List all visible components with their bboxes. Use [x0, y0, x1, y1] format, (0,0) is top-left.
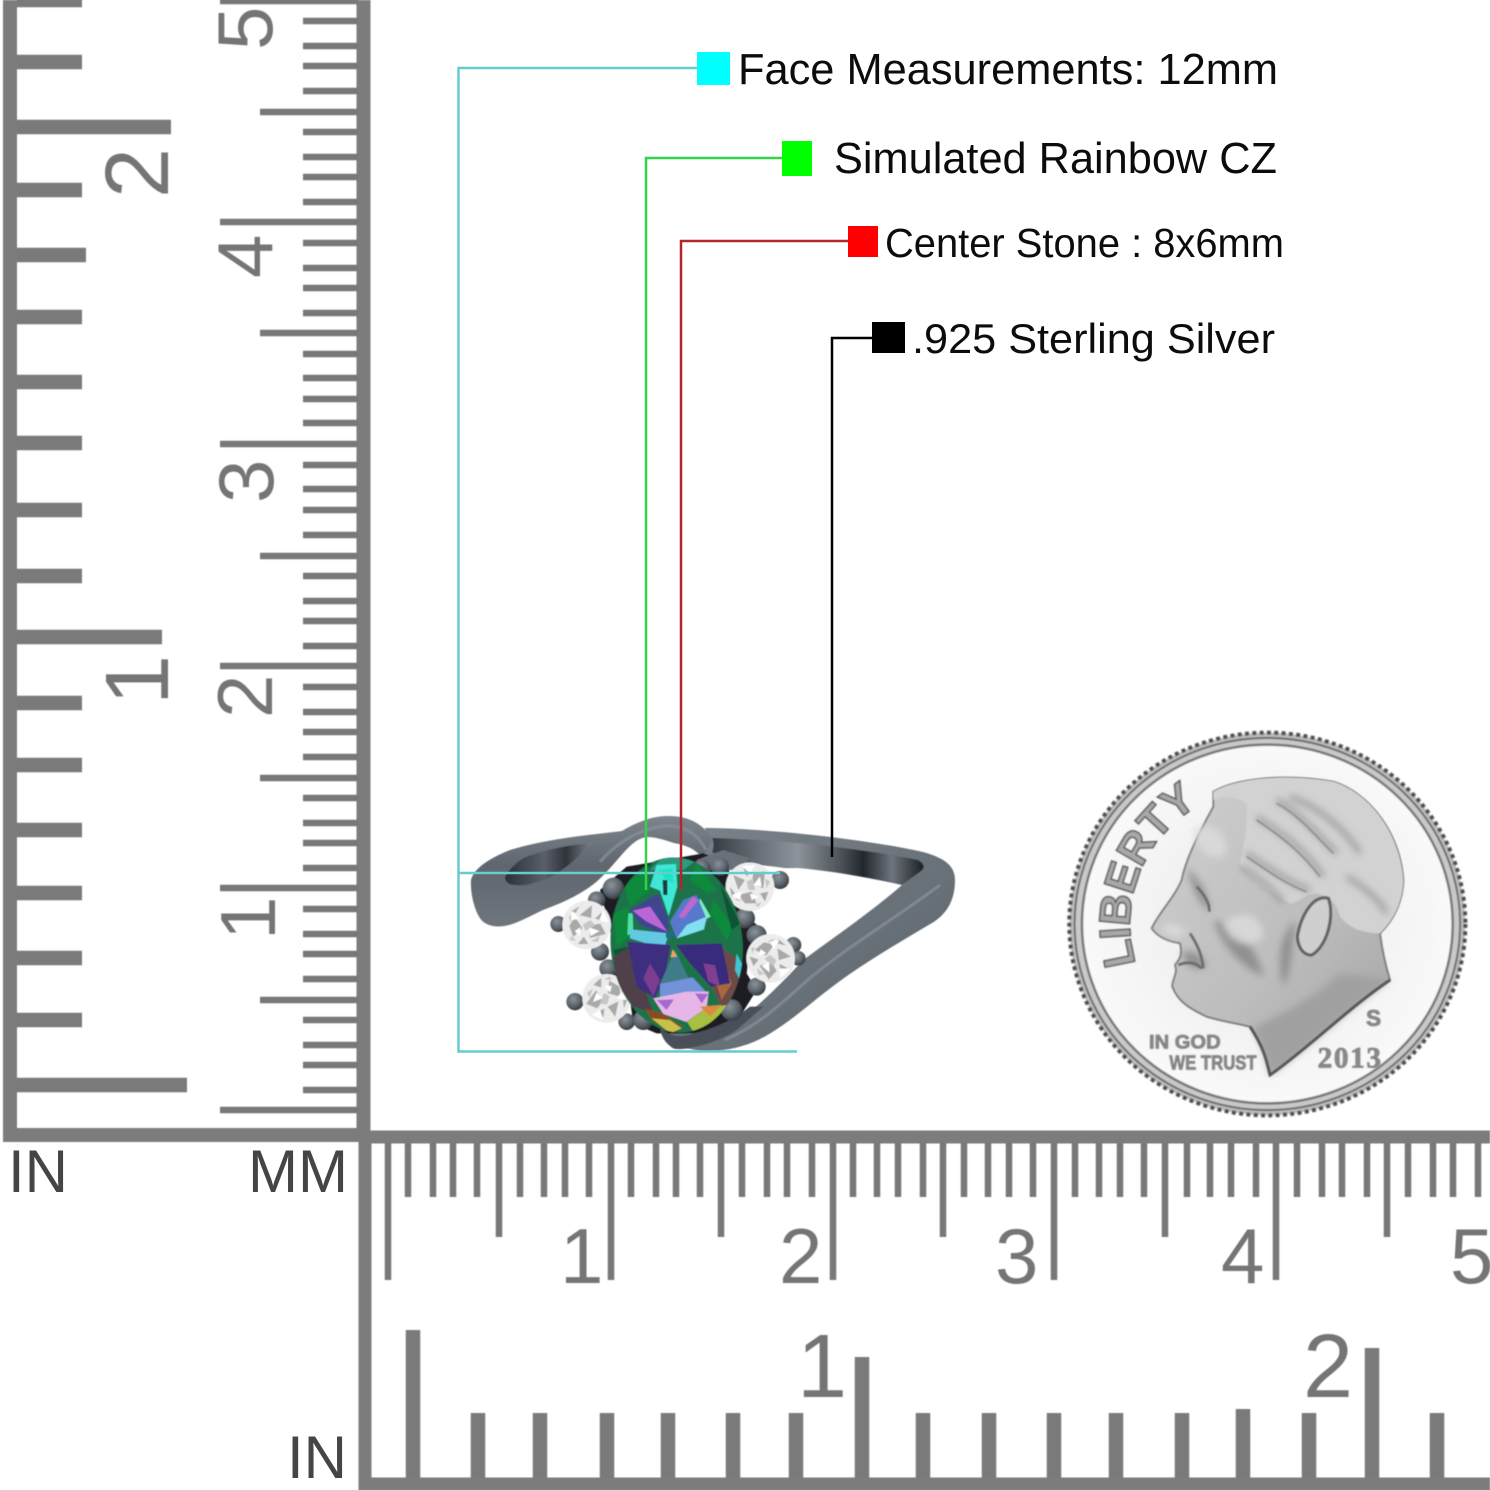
- callout: simulated rainbow CZ: [646, 134, 1277, 890]
- peak highlight: [600, 826, 706, 862]
- centimetre numerals: [201, 7, 292, 940]
- centimetre numerals: [560, 1212, 1490, 1300]
- inch numerals: 1: [797, 1317, 847, 1417]
- green leader line: [646, 158, 782, 890]
- inch scale ticks: [17, 0, 187, 1085]
- mystic oval centre stone: [607, 853, 747, 1037]
- small clear stone left: [555, 894, 618, 956]
- callout: sterling silver: [832, 315, 1275, 857]
- motto second line: WE TRUST: [1169, 1051, 1257, 1074]
- cheek highlight: [1160, 826, 1263, 944]
- label text: Simulated Rainbow CZ: [834, 134, 1277, 183]
- eye and mouth creases: [1178, 887, 1209, 968]
- centimetre numerals: 4: [201, 235, 289, 278]
- inch numerals: 2: [88, 148, 188, 198]
- hair: [1213, 778, 1403, 933]
- neck shadow: [1253, 973, 1390, 1075]
- dark setting base: [600, 853, 763, 1033]
- bust lower edge: [1250, 980, 1390, 1075]
- label text: Face Measurements: 12mm: [738, 45, 1278, 94]
- millimetre scale ticks: [388, 1143, 1478, 1280]
- portrait: [1152, 778, 1403, 1075]
- centimetre numerals: 2: [201, 675, 289, 718]
- unit label: IN left: IN: [8, 1138, 68, 1205]
- callout: face measurements: [458, 45, 1278, 1052]
- band highlight: [725, 885, 940, 1040]
- inch scale ticks: [413, 1330, 1437, 1478]
- right side of the band: [661, 828, 955, 1051]
- ruler frame: [365, 1137, 1490, 1484]
- centimetre numerals: 5: [201, 7, 289, 50]
- ring illustration: [471, 816, 955, 1051]
- dime coin: [1066, 730, 1468, 1118]
- mint mark: S: [1366, 1005, 1381, 1031]
- left vertical ruler: [10, 0, 364, 1135]
- cyan bracket lines: [458, 68, 797, 1052]
- centimetre numerals: 2: [779, 1212, 822, 1300]
- prongs: [550, 858, 806, 1030]
- red leader line: [681, 241, 848, 890]
- opening of the left band: [505, 843, 592, 885]
- callout: center stone: [681, 220, 1284, 890]
- inch numerals: 1: [88, 655, 188, 705]
- face shadows: [1182, 868, 1297, 987]
- red key square: [848, 226, 878, 257]
- inch numerals: [797, 1317, 1353, 1417]
- coin field: [1082, 745, 1453, 1103]
- inch numerals: [88, 148, 188, 705]
- inch numerals: 2: [1303, 1317, 1353, 1417]
- label text: Center Stone : 8x6mm: [885, 220, 1284, 266]
- label text: .925 Sterling Silver: [912, 315, 1275, 362]
- stone setting: [550, 850, 806, 1049]
- centimetre numerals: 3: [995, 1212, 1038, 1300]
- small clear stone right: [736, 924, 805, 993]
- unit label: MM: MM: [248, 1138, 348, 1205]
- centimetre numerals: 4: [1221, 1212, 1264, 1300]
- small clear stone top right: [726, 862, 774, 911]
- coin lettering: LIBERTY: [1098, 778, 1190, 969]
- unit label: IN bottom: IN: [287, 1424, 347, 1490]
- centimetre numerals: 1: [204, 897, 292, 940]
- motto: IN GOD: [1149, 1032, 1221, 1053]
- millimetre scale ticks: [220, 1, 358, 1110]
- cyan key square: [697, 52, 730, 85]
- black key square: [872, 322, 905, 353]
- rough gallery: [697, 850, 750, 870]
- raised rim: [1075, 738, 1460, 1110]
- hair fine lines: [1247, 803, 1333, 892]
- hair strands: [1242, 797, 1387, 913]
- reeded edge: [1069, 733, 1465, 1115]
- small clear stone bottom left: [573, 965, 640, 1032]
- centimetre numerals: 3: [202, 460, 290, 503]
- black leader line: [832, 338, 872, 857]
- inner face of the band: [712, 838, 924, 885]
- centimetre numerals: 1: [560, 1212, 603, 1300]
- date: 2013: [1318, 1042, 1381, 1074]
- green key square: [782, 141, 812, 176]
- bottom horizontal ruler: [365, 1137, 1490, 1484]
- head and bust: [1152, 778, 1403, 1075]
- lower band cup: [660, 1007, 763, 1049]
- ruler frame: [10, 0, 364, 1135]
- ear: [1297, 898, 1331, 955]
- left side of the band rising to the peak: [471, 816, 712, 926]
